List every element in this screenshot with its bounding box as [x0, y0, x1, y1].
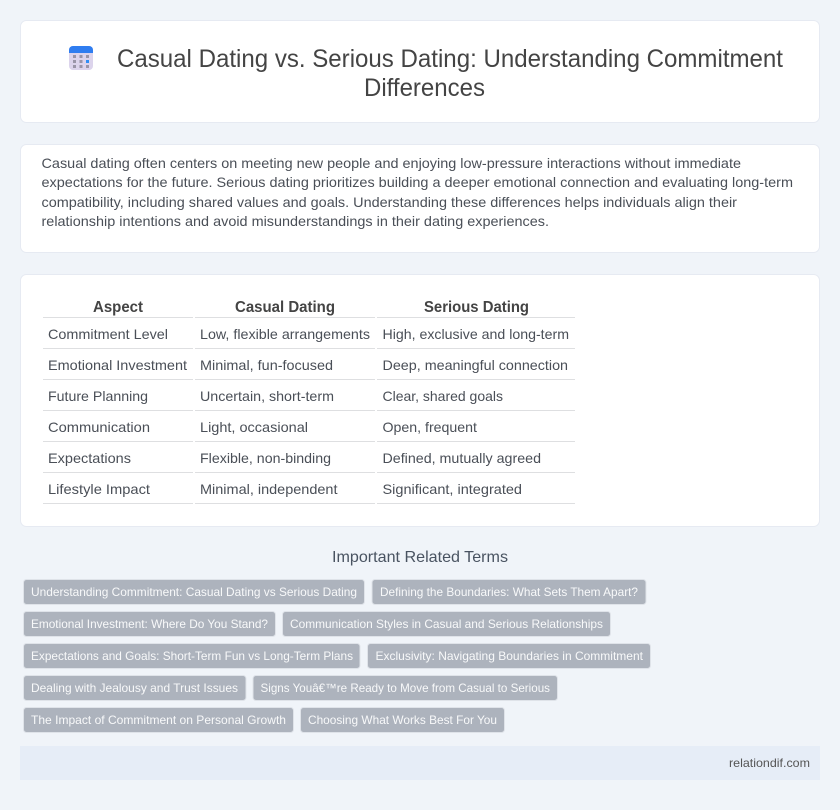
- tag: Choosing What Works Best For You: [308, 713, 497, 727]
- tag: [24, 644, 360, 668]
- row: communication: Communication: [48, 419, 150, 435]
- row: future planning: Clear, shared goals: [382, 388, 503, 404]
- tag: [24, 580, 364, 604]
- tag: The Impact of Commitment on Personal Growth: [31, 713, 286, 727]
- intro text: [42, 155, 793, 229]
- row: communication: [48, 419, 477, 435]
- tag: Emotional Investment: Where Do You Stand?: [31, 617, 268, 631]
- row: emotional investment: Emotional Investment: [48, 357, 187, 373]
- tag: [24, 708, 294, 732]
- tag: Defining the Boundaries: What Sets Them Apart?: [380, 585, 638, 599]
- table column headings: Serious Dating: [424, 299, 529, 316]
- row: future planning: Uncertain, short-term: [200, 388, 334, 404]
- tag: [368, 644, 650, 668]
- table column headings: [93, 299, 529, 316]
- intro text: expectations for the future. Serious dating prioritizes building a deeper emotional connection and evaluating long-term: [42, 174, 793, 190]
- tag: Dealing with Jealousy and Trust Issues: [31, 681, 238, 695]
- header panel: [20, 20, 820, 122]
- row: emotional investment: Deep, meaningful connection: [382, 357, 568, 373]
- panel: intro paragraph: [20, 144, 820, 252]
- tag: [24, 676, 246, 700]
- title: Casual Dating vs. Serious Dating: Understanding Commitment: [117, 45, 783, 73]
- intro text: relationship intentions and avoid misunderstandings in their dating experiences.: [42, 213, 549, 229]
- tag: [253, 676, 558, 700]
- footer source text: relationdif.com: [729, 756, 810, 770]
- title: [117, 45, 783, 102]
- tag: Understanding Commitment: Casual Dating vs Serious Dating: [31, 585, 357, 599]
- panel: comparison table: [20, 274, 820, 526]
- row: commitment level: High, exclusive and long-term: [382, 326, 569, 342]
- row: lifestyle impact: Minimal, independent: [200, 481, 338, 497]
- tag: [282, 612, 610, 636]
- row: lifestyle impact: Significant, integrated: [382, 481, 522, 497]
- table column headings: Aspect: [93, 299, 144, 316]
- row: expectations: Defined, mutually agreed: [382, 450, 541, 466]
- tag: [300, 708, 504, 732]
- row: commitment level: Commitment Level: [48, 326, 168, 342]
- table rules: [43, 317, 575, 504]
- table column headings: Casual Dating: [235, 299, 335, 316]
- row: communication: Light, occasional: [200, 419, 308, 435]
- title: Differences: [364, 74, 485, 102]
- row: emotional investment: Minimal, fun-focused: [200, 357, 333, 373]
- row: future planning: [48, 388, 503, 404]
- row: expectations: [48, 450, 541, 466]
- row: expectations: Expectations: [48, 450, 131, 466]
- row: communication: Open, frequent: [382, 419, 477, 435]
- tag: Signs Youâ€™re Ready to Move from Casual to Serious: [260, 681, 550, 695]
- row: lifestyle impact: Lifestyle Impact: [48, 481, 150, 497]
- tag: Exclusivity: Navigating Boundaries in Commitment: [376, 649, 644, 663]
- row: expectations: Flexible, non-binding: [200, 450, 331, 466]
- footer: [20, 746, 820, 780]
- tag: Communication Styles in Casual and Serious Relationships: [290, 617, 603, 631]
- tag: [372, 580, 646, 604]
- icon: calendar: [69, 46, 93, 70]
- row: future planning: Future Planning: [48, 388, 148, 404]
- intro text: Casual dating often centers on meeting new people and enjoying low-pressure interactions without immediate: [42, 155, 741, 171]
- row: commitment level: [48, 326, 569, 342]
- heading: important related terms: Important Related Terms: [332, 549, 508, 566]
- related term tags: [24, 580, 650, 732]
- tag: Expectations and Goals: Short-Term Fun vs Long-Term Plans: [31, 649, 353, 663]
- row: lifestyle impact: [48, 481, 522, 497]
- tag: [24, 612, 276, 636]
- row: commitment level: Low, flexible arrangements: [200, 326, 370, 342]
- row: emotional investment: [48, 357, 568, 373]
- intro text: compatibility, including shared values and goals. Understanding these differences helps individuals align their: [42, 194, 737, 210]
